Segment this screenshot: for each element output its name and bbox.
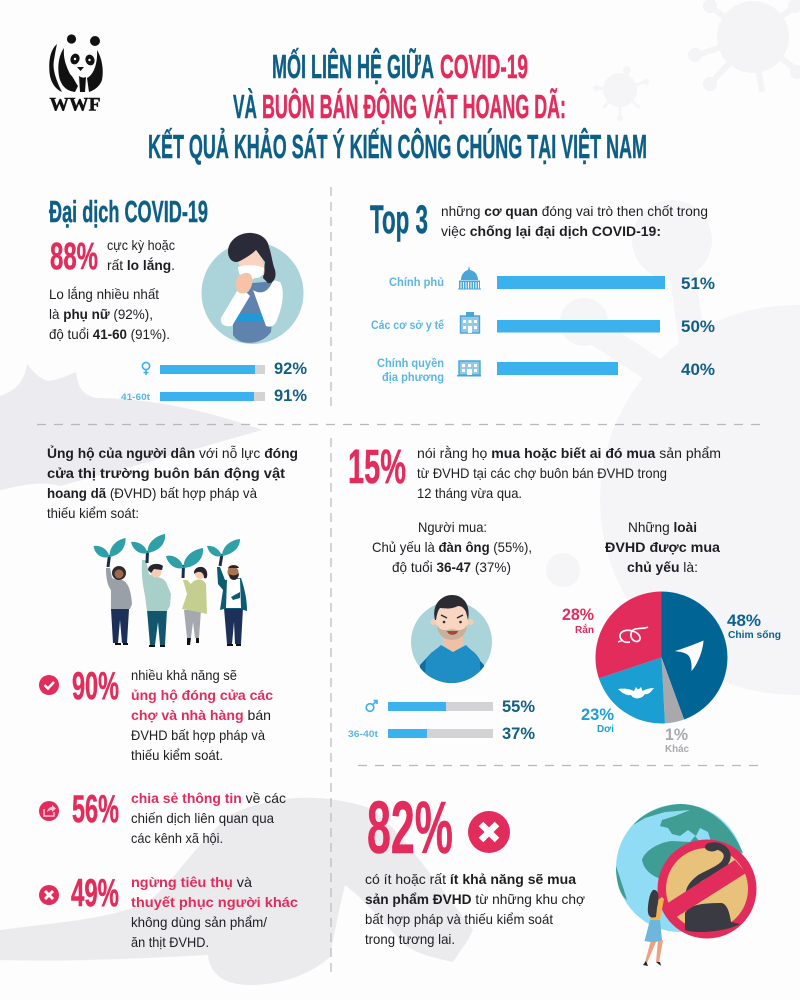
bar: age 41-60 91%: 41-60t — [121, 392, 150, 402]
text: most worried — [49, 286, 170, 342]
text: public support intro — [47, 444, 298, 521]
illustration: man — [411, 595, 492, 690]
panel: COVID-19 worry — [49, 194, 307, 405]
stat row: 90%: ĐVHD bất hợp pháp và — [131, 727, 265, 743]
stat row: 56%: chia sẻ thông tin về các — [131, 790, 286, 806]
logo: WWF panda — [49, 34, 103, 116]
icon: cross — [39, 885, 59, 905]
stat row: 90%: 90% — [72, 665, 119, 708]
label: snakes 28% — [562, 605, 594, 636]
bar: age 41-60 91%: 91% — [274, 386, 307, 405]
text: buyers description: từ ĐVHD tại các chợ buôn bán ĐVHD trong — [417, 465, 667, 481]
illustration: people holding plants — [94, 534, 247, 647]
pie chart: species — [596, 592, 727, 723]
panel: 82% unlikely to buy — [365, 786, 756, 966]
stat: 88%: 88% — [50, 236, 98, 278]
bar: age 36-40 37%: 37% — [502, 724, 535, 743]
person 4 — [217, 565, 247, 646]
label: live birds 48% — [727, 611, 781, 641]
text: buyer profile: độ tuổi 36-47 (37%) — [392, 559, 511, 575]
panel: 15% buy wildlife — [348, 441, 781, 755]
stat row: 49%: ăn thịt ĐVHD. — [131, 934, 209, 950]
text: very worried: rất lo lắng. — [107, 256, 175, 273]
text: buyer profile — [372, 519, 532, 575]
stat row: 49%: không dùng sản phẩm/ — [131, 914, 267, 930]
text: public support intro: Ủng hộ của người dân với nỗ lực đóng — [47, 444, 298, 461]
row: health facilities 50%: 50% — [681, 317, 715, 336]
no-snake sign — [658, 840, 756, 938]
woman pushing sign — [643, 890, 664, 966]
text: species heading — [605, 519, 720, 575]
stat row: 49%: 49% — [71, 872, 119, 915]
heading: Top 3: Top 3 — [370, 198, 428, 242]
text: future purchase: trong tương lai. — [365, 931, 455, 947]
stat row: 90%: ủng hộ đóng cửa các — [131, 687, 273, 703]
icon: building — [457, 361, 481, 376]
icon: share — [39, 801, 59, 821]
dividers — [37, 187, 765, 974]
person 3 — [182, 567, 207, 645]
text: agencies intro: những cơ quan đóng vai trò then chốt trong — [441, 203, 708, 219]
row: government 51%: 51% — [681, 274, 715, 293]
row: local government 40%: 40% — [681, 360, 715, 379]
stat row: 56% — [39, 788, 286, 846]
bar: men 55%: 55% — [502, 697, 535, 716]
label: bats 23%: 23% — [581, 705, 614, 724]
icon: bird — [675, 640, 704, 671]
icon: snake — [618, 627, 648, 642]
icon: bat — [618, 687, 654, 698]
icon: check — [39, 675, 59, 695]
row: local government 40%: Chính quyền — [377, 358, 444, 370]
row: health facilities 50% — [371, 312, 715, 336]
title: VÀ — [233, 88, 257, 125]
plant 1 — [94, 538, 126, 567]
text: public support intro: thiếu kiểm soát: — [47, 505, 139, 521]
stat row: 56%: 56% — [72, 788, 119, 831]
text: future purchase: sản phẩm ĐVHD từ những khu chợ — [365, 891, 585, 907]
text: buyer profile: Người mua: — [418, 519, 487, 535]
text: most worried: Lo lắng nhiều nhất — [49, 286, 159, 302]
stat row: 49% — [39, 872, 298, 950]
label: bats 23% — [581, 705, 614, 735]
person 1 — [106, 566, 132, 645]
text: species heading: ĐVHD được mua — [605, 539, 720, 555]
text: future purchase — [365, 871, 585, 947]
text: public support intro: hoang dã (ĐVHD) bất hợp pháp và — [47, 485, 257, 501]
stat row: 49%: thuyết phục người khác — [131, 894, 298, 910]
bar: age 36-40 37%: 36-40t — [348, 729, 378, 739]
stat row: 90%: nhiều khả năng sẽ — [131, 667, 237, 683]
text: agencies intro: việc chống lại đại dịch COVID-19: — [441, 223, 661, 239]
row: government 51% — [389, 266, 715, 293]
label: bats 23%: Dơi — [597, 723, 614, 735]
icon: large cross — [468, 811, 510, 853]
text: buyers description: 12 tháng vừa qua. — [417, 485, 522, 501]
stat: 82%: 82% — [367, 786, 453, 869]
icon: government dome — [458, 266, 481, 290]
text: species heading: chủ yếu là: — [627, 559, 698, 575]
stat row: 56%: các kênh xã hội. — [131, 830, 223, 846]
bar: women 92%: 92% — [274, 359, 307, 378]
panel: public support — [39, 444, 298, 950]
text: future purchase: có ít hoặc rất ít khả năng sẽ mua — [365, 871, 576, 887]
stat row: 56%: chiến dịch liên quan qua — [131, 810, 274, 826]
bar: men 55% — [366, 697, 535, 716]
text: most worried: là phụ nữ (92%), — [49, 306, 153, 322]
illustration: globe with no-snake sign and woman — [616, 804, 756, 966]
plant 2 — [131, 534, 165, 563]
title: COVID-19 — [440, 48, 528, 85]
globe — [616, 804, 744, 932]
illustration: woman with mask — [202, 233, 304, 344]
bar: age 36-40 37% — [348, 724, 535, 743]
text: very worried — [107, 237, 175, 273]
title: MỐI LIÊN HỆ GIỮA — [272, 47, 434, 85]
row: local government 40% — [377, 358, 715, 384]
heading: Đại dịch COVID-19: Đại dịch COVID-19 — [49, 194, 208, 229]
bar: women 92% — [142, 359, 307, 378]
text: buyers description — [417, 445, 721, 501]
text: most worried: độ tuổi 41-60 (91%). — [49, 326, 170, 342]
text: species heading: Những loài — [628, 519, 697, 535]
text: agencies intro — [441, 203, 708, 239]
logo: WWF panda: WWF — [50, 94, 100, 116]
stat: 15%: 15% — [348, 441, 406, 494]
label: other 1%: 1% — [665, 725, 688, 744]
stat row: 90% — [39, 665, 273, 763]
text: buyer profile: Chủ yếu là đàn ông (55%), — [372, 539, 532, 555]
row: local government 40%: địa phương — [382, 372, 444, 384]
label: other 1%: Khác — [665, 743, 689, 755]
label: snakes 28%: 28% — [562, 605, 594, 624]
text: buyers description: nói rằng họ mua hoặc biết ai đó mua sản phẩm — [417, 445, 721, 461]
label: live birds 48%: 48% — [727, 611, 761, 630]
row: government 51%: Chính phủ — [389, 277, 444, 289]
text: very worried: cực kỳ hoặc — [107, 237, 175, 253]
icon: hospital — [460, 312, 480, 333]
icon: male symbol — [366, 700, 377, 711]
label: live birds 48%: Chim sống — [728, 629, 781, 641]
label: other 1% — [665, 725, 689, 755]
row: health facilities 50%: Các cơ sở y tế — [371, 320, 445, 332]
stat row: 90%: thiếu kiểm soát. — [131, 747, 223, 763]
stat row: 49%: ngừng tiêu thụ và — [131, 874, 252, 890]
stat row: 90%: chợ và nhà hàng bán — [131, 707, 271, 723]
bar: age 41-60 91% — [121, 386, 307, 405]
person 2 — [142, 560, 171, 647]
text: future purchase: bất hợp pháp và thiếu kiểm soát — [365, 911, 553, 927]
plant 4 — [207, 539, 240, 566]
text: public support intro: cửa thị trường buôn bán động vật — [47, 465, 285, 481]
panel: Top 3 agencies — [370, 198, 715, 384]
plant 3 — [166, 548, 203, 578]
title — [148, 47, 647, 165]
icon: female symbol — [142, 362, 150, 375]
label: snakes 28%: Rắn — [575, 623, 594, 636]
